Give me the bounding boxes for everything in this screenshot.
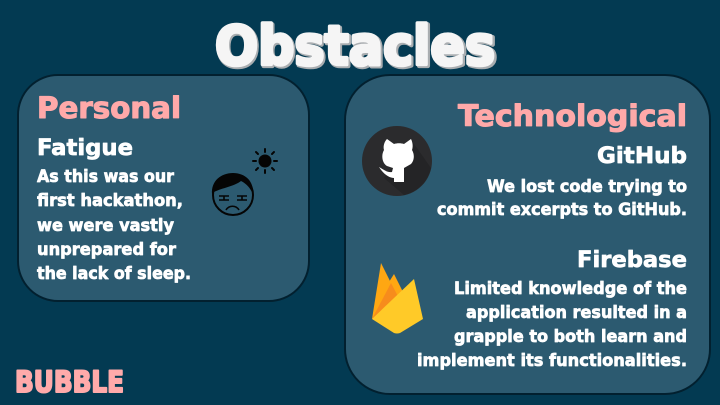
icon: github [362, 126, 432, 196]
text block: firebase description: grapple to both learn and [454, 327, 687, 346]
text block: firebase description [417, 279, 687, 370]
subheading: github: GitHub [597, 144, 687, 169]
subheading: firebase: Firebase [577, 248, 687, 273]
text block: fatigue description: we were vastly [37, 216, 174, 235]
text block: github description: We lost code trying to [487, 177, 687, 196]
title: Obstacles [216, 16, 497, 79]
heading: technological: Technological [458, 99, 687, 133]
text block: firebase description: implement its functionalities. [417, 351, 687, 370]
heading: personal: Personal [37, 91, 181, 125]
text block: fatigue description: the lack of sleep. [37, 264, 191, 283]
icon: tired face [212, 173, 253, 215]
text block: fatigue description: unprepared for [37, 240, 177, 259]
title: Obstacles [215, 14, 495, 78]
text block: fatigue description [37, 167, 191, 283]
panel: personal [18, 75, 309, 301]
text block: firebase description: Limited knowledge of the [454, 279, 687, 298]
logo: bubble: BUBBLE [15, 365, 124, 399]
text block: github description: commit excerpts to GitHub. [437, 200, 687, 219]
icon: firebase [372, 263, 423, 334]
text block: fatigue description: As this was our [37, 167, 175, 186]
text block: github description [437, 177, 687, 219]
icon: sun [253, 149, 277, 173]
text block: firebase description: application resulted in a [466, 303, 687, 322]
text block: fatigue description: first hackathon, [37, 191, 183, 210]
subheading: fatigue: Fatigue [37, 136, 133, 161]
